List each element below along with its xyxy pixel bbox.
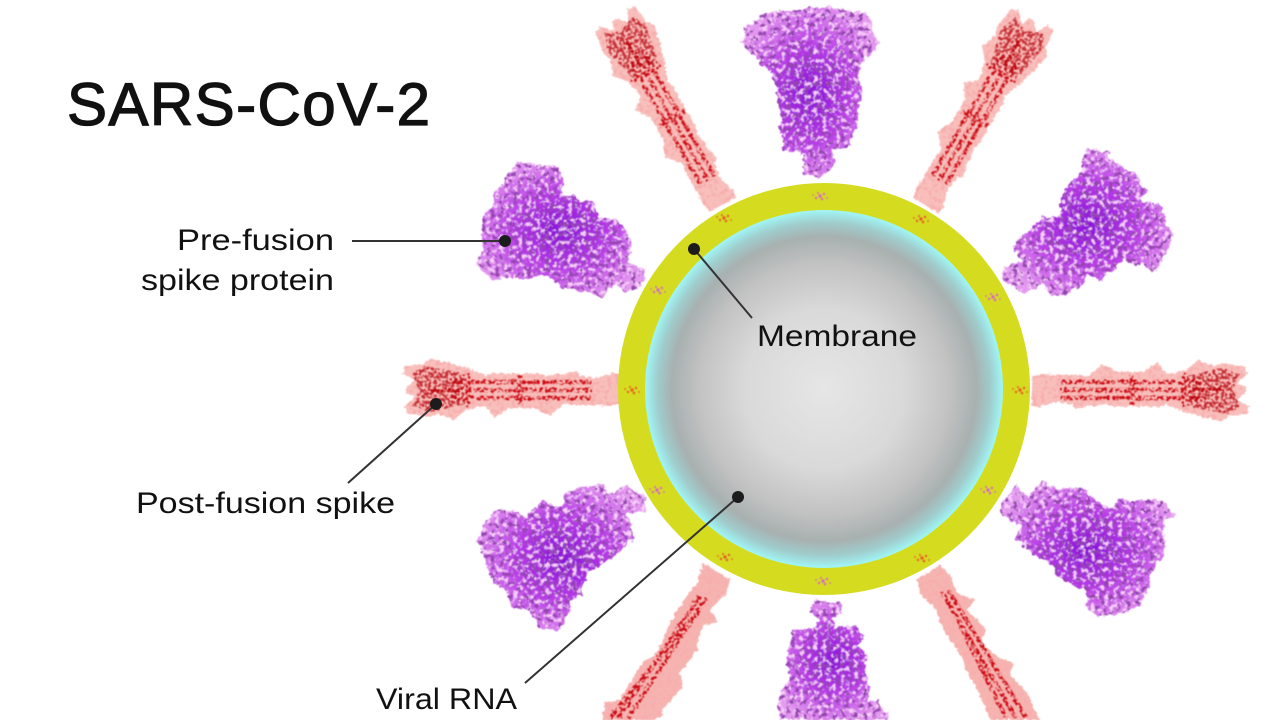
label: viral RNA: Viral RNA (376, 683, 517, 716)
leader: pre-fusion (352, 235, 511, 247)
pre-fusion spike: lower left (478, 483, 647, 632)
post-fusion spike: right (1032, 360, 1249, 422)
title: SARS-CoV-2 (67, 71, 430, 138)
viral core with membrane edge (645, 210, 1003, 568)
pre-fusion spike: upper left (475, 162, 647, 297)
outer envelope ring (618, 183, 1030, 595)
membrane protein specks (624, 192, 1028, 585)
label: pre-fusion spike protein, second line: spike protein (141, 264, 334, 297)
post-fusion spike: top left (588, 1, 750, 220)
post-fusion spike: top right (899, 2, 1061, 221)
pre-fusion spike: top (742, 7, 878, 178)
pre-fusion spike: lower right (1002, 480, 1173, 617)
post-fusion spike: bottom left (602, 563, 730, 720)
leader: membrane (688, 243, 752, 318)
label: post-fusion spike: Post-fusion spike (136, 487, 395, 520)
label: membrane: Membrane (757, 320, 917, 353)
post-fusion spike: bottom right (917, 565, 1040, 720)
leader: post-fusion (348, 398, 442, 483)
pre-fusion spike: upper right (1003, 150, 1172, 297)
label: pre-fusion spike protein: Pre-fusion (177, 224, 334, 257)
leader: viral RNA (525, 491, 744, 683)
pre-fusion spike: bottom (777, 600, 888, 720)
virus particle (618, 183, 1030, 595)
post-fusion spike: left (403, 358, 620, 420)
